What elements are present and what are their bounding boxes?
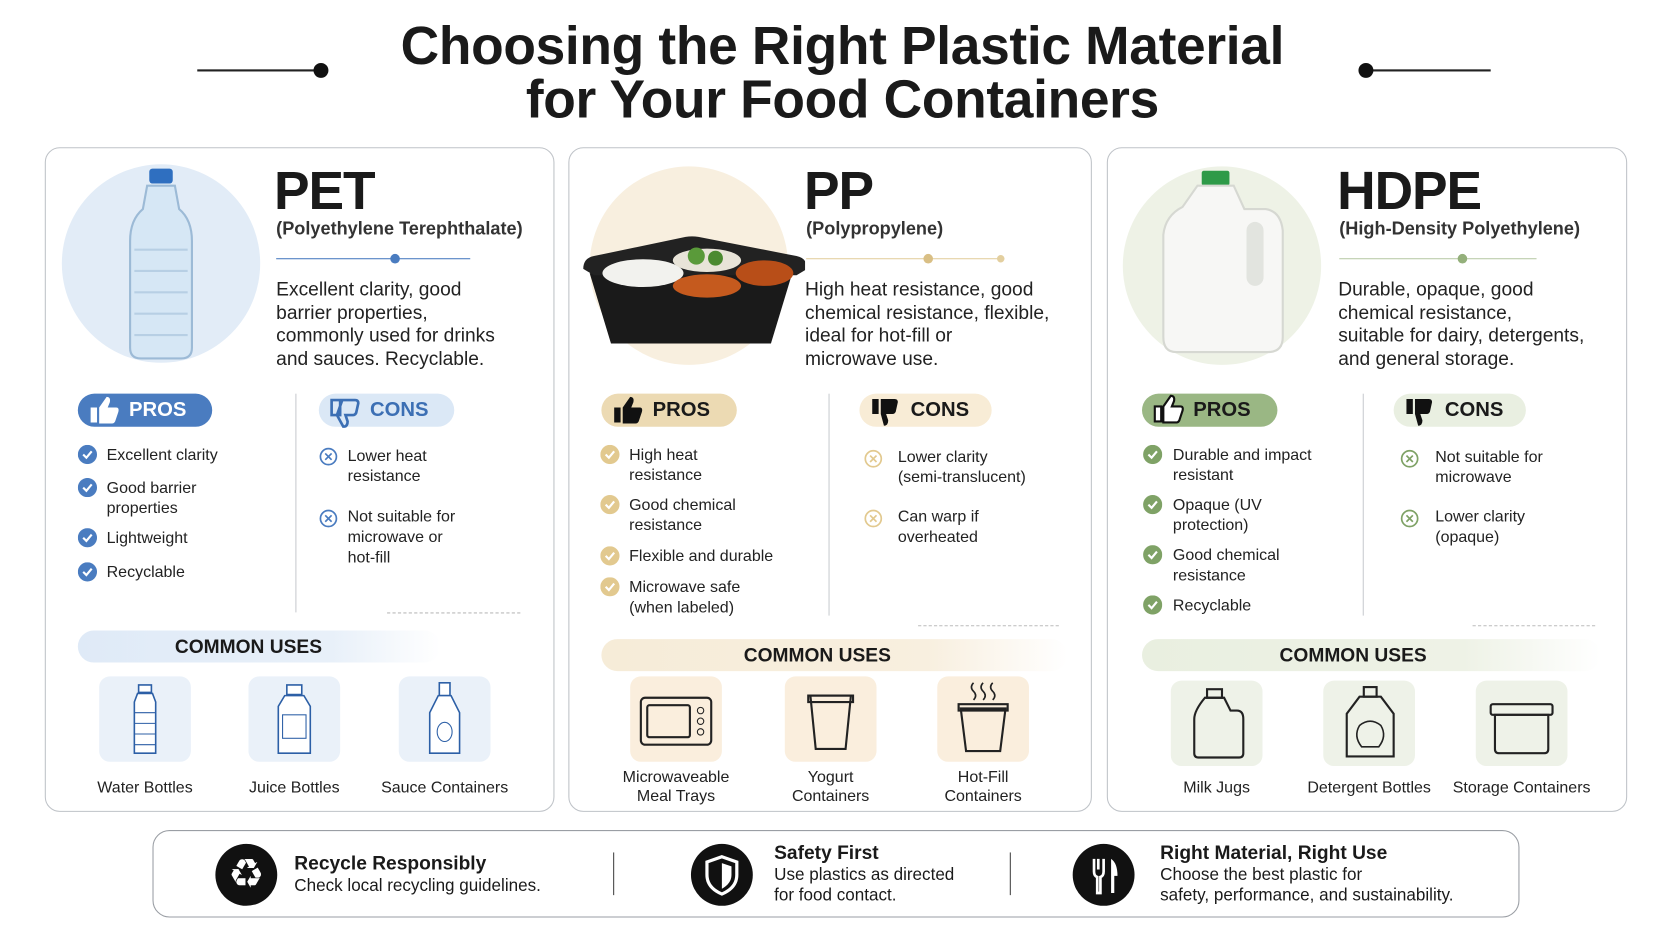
panel: PP bbox=[568, 147, 1092, 812]
description: microwave use. bbox=[805, 347, 938, 369]
pros list bbox=[600, 445, 773, 617]
image: meal tray bbox=[590, 166, 788, 365]
pros list: resistant bbox=[1173, 466, 1233, 484]
pros pill bbox=[1142, 394, 1277, 427]
footer item: safety: for food contact. bbox=[774, 887, 896, 905]
pros list bbox=[1143, 444, 1312, 615]
cons list: Can warp if bbox=[898, 508, 979, 526]
cons list bbox=[320, 447, 455, 567]
pros list: Microwave safe bbox=[629, 578, 740, 596]
cons pill bbox=[1394, 394, 1526, 427]
heading: PP bbox=[804, 161, 873, 221]
cons pill bbox=[859, 394, 992, 427]
common uses: COMMON USES bbox=[1280, 644, 1427, 666]
cons list: (opaque) bbox=[1435, 528, 1499, 546]
panel: PP: Meal Trays bbox=[637, 787, 715, 806]
pros list: Good chemical bbox=[1173, 546, 1280, 564]
panel: HDPE: Storage Containers bbox=[1453, 779, 1591, 797]
panel: PET: (Polyethylene Terephthalate) bbox=[276, 219, 523, 239]
pros list: Good chemical bbox=[629, 496, 736, 514]
footer item: right material: Right Material, Right Use bbox=[1160, 842, 1387, 863]
pros list: Recyclable bbox=[107, 563, 185, 581]
description: and general storage. bbox=[1338, 347, 1514, 369]
image: milk jug bbox=[1123, 166, 1321, 365]
cons list: (semi-translucent) bbox=[898, 468, 1026, 487]
pros list: Excellent clarity bbox=[107, 446, 218, 464]
pros pill: PROS bbox=[1193, 399, 1251, 421]
cons list: microwave bbox=[1435, 468, 1512, 487]
heading: PET bbox=[274, 161, 375, 221]
common uses bbox=[1142, 639, 1601, 671]
footer item: safety: Use plastics as directed bbox=[774, 866, 954, 884]
description: ideal for hot-fill or bbox=[805, 324, 952, 346]
pros list: properties bbox=[107, 499, 178, 517]
footer item: recycle: ♻ bbox=[228, 852, 264, 897]
pros list: Recyclable bbox=[1173, 596, 1251, 615]
footer item: safety: Safety First bbox=[774, 842, 879, 863]
pros list: Flexible and durable bbox=[629, 547, 773, 565]
pros list: Good barrier bbox=[107, 479, 196, 497]
cons pill bbox=[319, 394, 454, 427]
common uses: COMMON USES bbox=[175, 636, 322, 657]
cons list: hot-fill bbox=[348, 548, 390, 567]
cons list: Lower clarity bbox=[898, 448, 988, 466]
description: commonly used for drinks bbox=[276, 324, 495, 346]
panel: PET: Water Bottles bbox=[97, 779, 193, 797]
cons list bbox=[1400, 448, 1543, 546]
pros list: High heat bbox=[629, 446, 698, 464]
panel: PET bbox=[45, 147, 554, 812]
description: Excellent clarity, good bbox=[276, 278, 461, 300]
description bbox=[1338, 278, 1584, 369]
panel: HDPE: (High-Density Polyethylene) bbox=[1339, 219, 1580, 239]
description: chemical resistance, flexible, bbox=[805, 301, 1049, 323]
panel: PP: (Polypropylene) bbox=[806, 219, 943, 239]
description: barrier properties, bbox=[276, 301, 428, 323]
cons list: Lower clarity bbox=[1435, 508, 1525, 526]
panel: HDPE: Milk Jugs bbox=[1183, 779, 1250, 797]
footer item: right material: safety, performance, and sustainability. bbox=[1160, 887, 1453, 905]
panel: PP: Containers bbox=[792, 787, 869, 806]
cons list: Not suitable for bbox=[348, 508, 455, 526]
pros list: Lightweight bbox=[107, 529, 188, 547]
description bbox=[276, 278, 495, 369]
footer item: right material: Choose the best plastic for bbox=[1160, 866, 1362, 884]
cons pill: CONS bbox=[1445, 399, 1503, 421]
title bbox=[401, 16, 1284, 129]
panel: HDPE bbox=[1107, 147, 1627, 812]
pros pill bbox=[601, 394, 737, 427]
panel: PP: Microwaveable bbox=[623, 768, 729, 786]
panel: PP: Hot-Fill bbox=[958, 768, 1008, 786]
cons list: overheated bbox=[898, 528, 978, 546]
footer item: right material bbox=[1072, 842, 1453, 906]
description: Durable, opaque, good bbox=[1338, 278, 1534, 300]
cons list: microwave or bbox=[348, 528, 443, 546]
pros list: (when labeled) bbox=[629, 599, 734, 617]
cons pill: CONS bbox=[911, 399, 969, 421]
description: chemical resistance, bbox=[1338, 301, 1512, 323]
common uses bbox=[601, 639, 1067, 671]
description: and sauces. Recyclable. bbox=[276, 347, 484, 369]
cons list: resistance bbox=[348, 467, 421, 485]
pros list: resistance bbox=[629, 466, 702, 484]
panel: PP: Containers bbox=[944, 787, 1022, 806]
title: Choosing the Right Plastic Material bbox=[401, 16, 1284, 76]
pros pill: PROS bbox=[129, 399, 186, 421]
title: for Your Food Containers bbox=[526, 69, 1159, 129]
pros list: protection) bbox=[1173, 516, 1249, 535]
footer item: safety bbox=[690, 842, 954, 906]
pros list: Durable and impact bbox=[1173, 446, 1312, 464]
panel: PET: Juice Bottles bbox=[249, 779, 340, 797]
pros list: Opaque (UV bbox=[1173, 496, 1262, 514]
common uses: COMMON USES bbox=[744, 644, 891, 666]
pros list: resistance bbox=[629, 516, 702, 535]
cons list bbox=[864, 448, 1026, 546]
heading: HDPE bbox=[1337, 161, 1481, 221]
footer item: recycle bbox=[215, 844, 541, 906]
description: suitable for dairy, detergents, bbox=[1338, 324, 1584, 346]
panel: PP: Yogurt bbox=[808, 768, 853, 786]
cons list: Not suitable for bbox=[1435, 448, 1543, 466]
pros pill bbox=[78, 394, 212, 427]
pros pill: PROS bbox=[653, 399, 710, 421]
panel: PET: Sauce Containers bbox=[381, 779, 508, 797]
description: High heat resistance, good bbox=[805, 278, 1033, 300]
cons list: Lower heat bbox=[348, 447, 427, 465]
pros list bbox=[78, 444, 218, 582]
footer bar bbox=[152, 830, 1519, 918]
common uses bbox=[78, 631, 440, 663]
description bbox=[805, 278, 1049, 369]
footer item: recycle: Check local recycling guidelines. bbox=[294, 877, 541, 895]
cons pill: CONS bbox=[370, 399, 429, 421]
footer item: recycle: Recycle Responsibly bbox=[294, 852, 486, 874]
panel: HDPE: Detergent Bottles bbox=[1307, 779, 1431, 797]
pros list: resistance bbox=[1173, 567, 1246, 585]
image: water bottle bbox=[62, 164, 260, 363]
